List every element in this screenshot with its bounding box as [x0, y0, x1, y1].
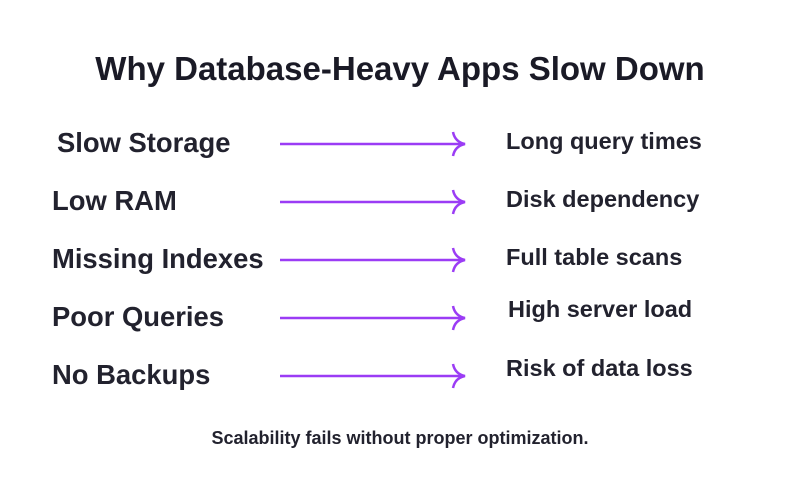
arrow 3: [280, 248, 465, 272]
cause: low RAM: Low RAM: [52, 185, 177, 216]
effect: full table scans: Full table scans: [506, 244, 682, 270]
effect: disk dependency: Disk dependency: [506, 186, 699, 212]
arrow 1: [280, 132, 465, 156]
arrow 4: [280, 306, 465, 330]
arrow 2: [280, 190, 465, 214]
footer note: Scalability fails without proper optimization.: [211, 428, 589, 448]
cause: no backups: No Backups: [52, 359, 210, 390]
effect: long query times: Long query times: [506, 128, 702, 154]
effect: high server load: High server load: [508, 296, 692, 322]
cause: poor queries: Poor Queries: [52, 301, 224, 332]
effect: risk of data loss: Risk of data loss: [506, 355, 693, 381]
cause: slow storage: Slow Storage: [57, 127, 231, 158]
arrow 5: [280, 364, 465, 388]
cause: missing indexes: Missing Indexes: [52, 243, 264, 274]
title: Why Database-Heavy Apps Slow Down: [95, 50, 705, 87]
